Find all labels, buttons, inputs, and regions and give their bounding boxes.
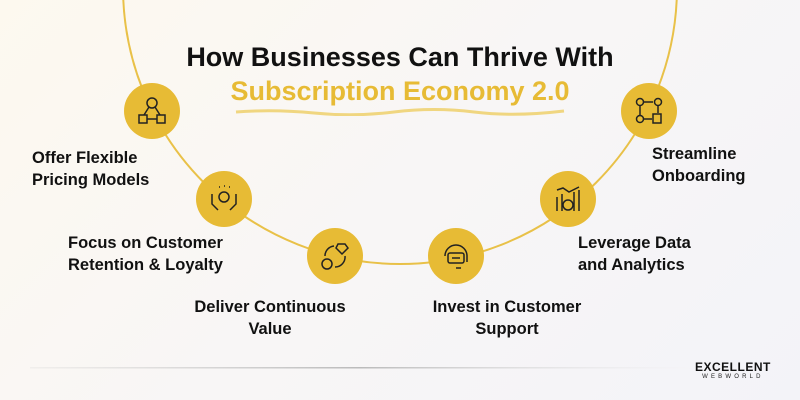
icon: retention [196,171,252,227]
icon: support [428,228,484,284]
text: value [194,298,346,338]
title [186,42,614,116]
text: onboarding: Streamline [652,145,736,163]
text: data: Leverage Data [578,234,691,252]
logo: EXCELLENT [695,360,771,374]
text: support: Invest in Customer [433,298,581,316]
icon: onboarding [621,83,677,139]
text: support: Support [475,320,539,338]
text: onboarding: Onboarding [652,167,746,185]
icon: value [307,228,363,284]
text: retention: Focus on Customer [68,234,223,252]
text: retention: Retention & Loyalty [68,256,223,274]
underline squiggle [236,108,564,116]
text: pricing: Pricing Models [32,171,149,189]
title: How Businesses Can Thrive With [186,42,614,72]
text: data [578,234,691,274]
icon: data [540,171,596,227]
text: value: Deliver Continuous [194,298,346,316]
text: onboarding [652,145,746,185]
text: pricing [32,149,149,189]
text: support [433,298,582,338]
text: pricing: Offer Flexible [32,149,137,167]
text: value: Value [248,320,292,338]
logo: WEBWORLD [702,374,764,380]
text: data: and Analytics [578,256,685,274]
text: retention [68,234,223,274]
title: Subscription Economy 2.0 [230,76,570,106]
icon: pricing [124,83,180,139]
